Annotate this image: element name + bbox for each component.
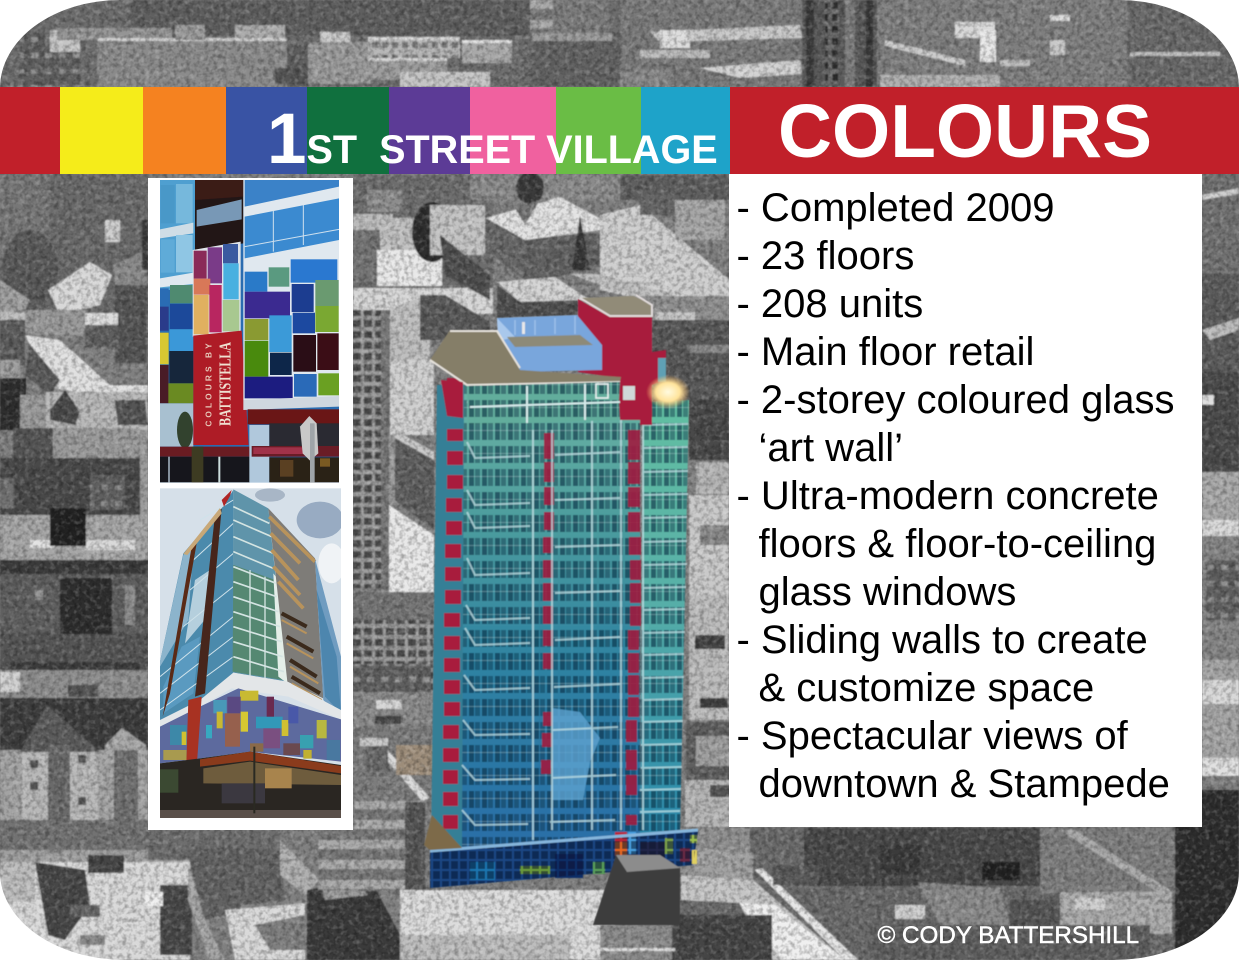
facts list: - 208 units — [736, 282, 923, 326]
facts list: & customize space — [758, 666, 1094, 710]
middle column — [353, 175, 493, 295]
tower left edge sliver — [431, 385, 466, 850]
top glass floors — [467, 382, 620, 425]
photo: tower from street — [160, 488, 345, 818]
gabled apartment — [0, 698, 148, 758]
facts list: - Main floor retail — [736, 330, 1034, 374]
bottom roofs — [400, 890, 615, 960]
facts list: - Ultra-modern concrete — [736, 474, 1159, 518]
bottom right district — [680, 827, 1239, 960]
facts list: glass windows — [758, 570, 1016, 614]
corner red rooftop strip — [441, 380, 463, 418]
roof of red core — [580, 296, 652, 316]
podium roof plaza — [424, 815, 462, 850]
facts list: floors & floor-to-ceiling — [758, 522, 1156, 566]
photo credit: © CODY BATTERSHILL — [878, 922, 1139, 949]
tower: colours building — [424, 295, 698, 925]
dark foreground block — [1175, 790, 1239, 960]
facts list: - Completed 2009 — [736, 186, 1054, 230]
facts list: downtown & Stampede — [758, 762, 1170, 806]
facts list: - 23 floors — [736, 234, 914, 278]
facts list: - Spectacular views of — [736, 714, 1129, 758]
centre facade — [233, 489, 287, 682]
tower main facade — [462, 378, 640, 848]
photo: coloured glass art wall — [160, 180, 339, 482]
street sign — [300, 416, 318, 461]
forest, upper left — [0, 174, 148, 324]
facts list: ‘art wall’ — [758, 426, 903, 470]
parking row — [0, 634, 148, 670]
clouds and sky — [297, 502, 343, 538]
right balconies — [268, 508, 323, 698]
lens flare — [646, 375, 690, 409]
snow parking lot — [0, 862, 190, 960]
left facade — [160, 490, 233, 728]
right glass wall — [243, 180, 339, 400]
red core tower — [578, 299, 652, 425]
facts panel — [729, 174, 1202, 827]
right of tower — [689, 400, 729, 460]
art-wall panels — [193, 242, 241, 337]
right strip — [1202, 174, 1239, 274]
tower centre red columns — [541, 430, 641, 825]
right glass — [315, 558, 341, 718]
slab tower left of centre — [353, 310, 389, 588]
glass reflection — [552, 708, 600, 800]
balcony recess — [195, 180, 243, 250]
flat roof block — [0, 515, 148, 560]
tower left red balconies — [443, 378, 463, 829]
photo: coloured glass art wall: BATTISTELLA — [216, 342, 235, 426]
heading: COLOURS: COLOURS — [778, 89, 1152, 173]
coloured podium — [160, 688, 341, 763]
balcony strips — [163, 543, 197, 717]
floor slabs — [462, 400, 688, 840]
roof cap — [183, 508, 222, 555]
brick block — [15, 428, 140, 458]
photo: coloured glass art wall: COLOURS BY — [203, 343, 213, 427]
facts list: - 2-storey coloured glass — [736, 378, 1174, 422]
red sign — [193, 331, 249, 445]
top skyline — [0, 0, 1239, 87]
tower roof deck — [430, 330, 621, 385]
header title: 1st Street Village: 1ST STREET VILLAGE — [267, 100, 718, 179]
tower right facade — [640, 400, 689, 833]
condo block lower left — [0, 574, 148, 634]
office block — [353, 592, 433, 620]
facts list — [736, 186, 1174, 806]
penthouse — [497, 315, 602, 372]
upper white band — [160, 673, 341, 728]
podium with coloured glass — [430, 830, 698, 888]
facts list: - Sliding walls to create — [736, 618, 1148, 662]
retail base — [160, 752, 341, 810]
rooftop structure in foreground — [593, 855, 680, 925]
header colour band — [0, 87, 1239, 174]
white photo frame — [148, 178, 353, 830]
mid-low buildings — [148, 830, 280, 860]
